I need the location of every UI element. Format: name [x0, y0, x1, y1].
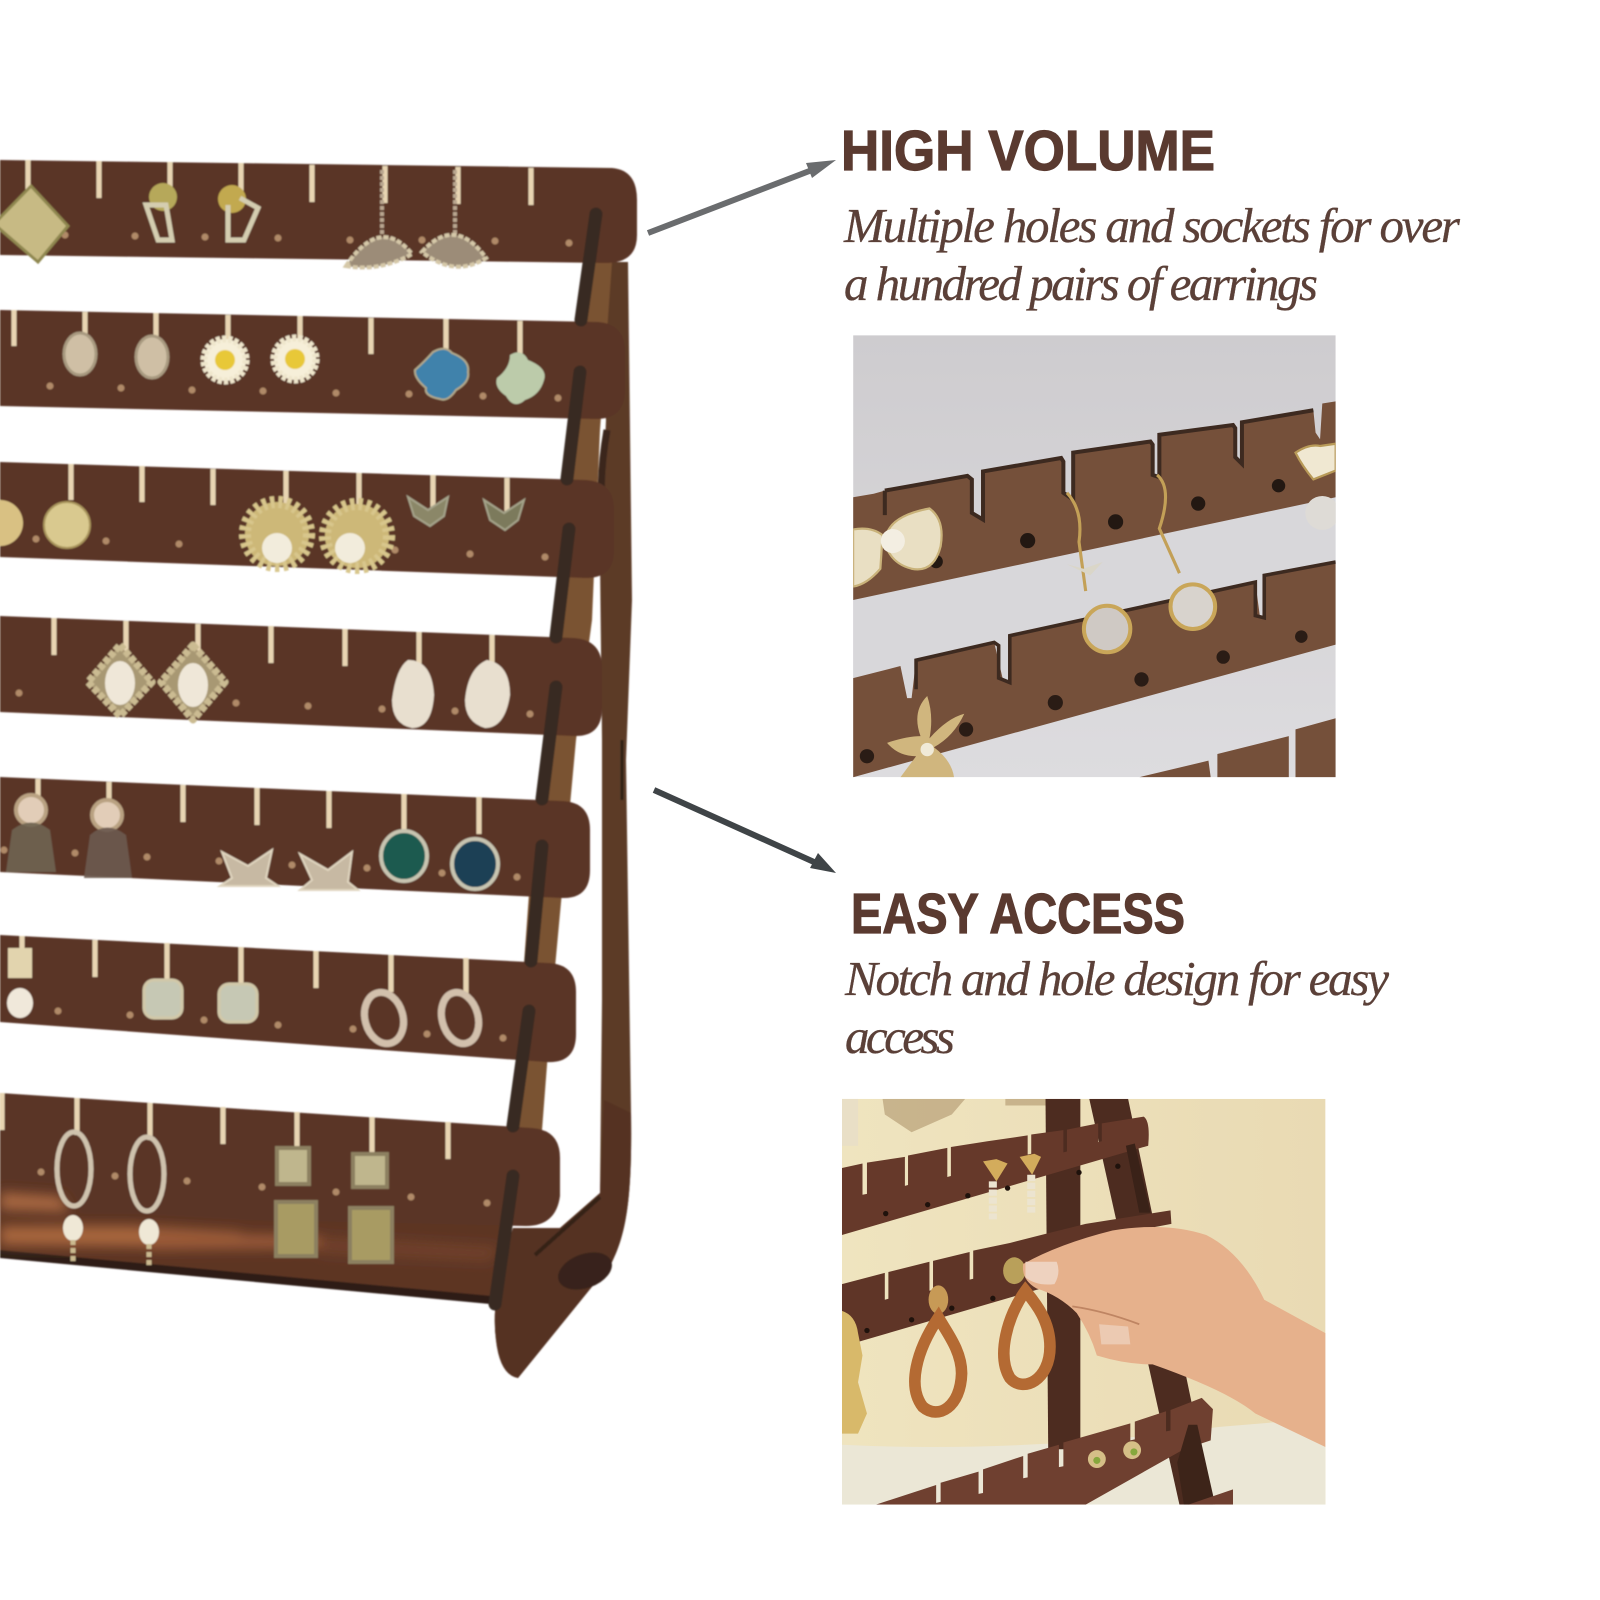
photo: hand taking an earring	[842, 1099, 1325, 1505]
arrow: to Easy Access	[654, 790, 836, 873]
earrings row 2	[64, 333, 545, 404]
description: High Volume	[843, 198, 1461, 311]
description: Easy Access: access	[845, 1009, 955, 1064]
lower back plate	[0, 1190, 513, 1304]
board 4	[0, 616, 602, 736]
arrow: to High Volume	[648, 160, 836, 233]
description: High Volume: Multiple holes and sockets for over	[843, 198, 1461, 253]
earrings row 7	[57, 1132, 392, 1266]
description: Easy Access: Notch and hole design for easy	[844, 951, 1389, 1006]
earrings row 3	[0, 497, 524, 568]
dark leg slots between boards	[495, 214, 596, 1304]
heading: High Volume: HIGH VOLUME	[841, 119, 1215, 183]
description: High Volume: a hundred pairs of earrings	[844, 256, 1318, 311]
photo: close-up of notches and holes	[853, 335, 1339, 777]
description: Easy Access	[844, 951, 1389, 1064]
earrings row 6	[7, 948, 484, 1048]
product photo: earring stand	[0, 160, 637, 1378]
board 7	[0, 1093, 560, 1226]
board 2	[0, 310, 625, 419]
earrings row 1	[0, 170, 486, 268]
stand frame and foot	[495, 262, 632, 1378]
board 1	[0, 160, 637, 263]
board 5	[0, 777, 590, 898]
earrings row 4	[88, 645, 510, 728]
board 6	[0, 935, 576, 1062]
earrings row 5	[6, 795, 498, 890]
board 3	[0, 462, 614, 578]
infographic canvas	[0, 130, 1460, 1505]
heading: Easy Access: EASY ACCESS	[851, 882, 1185, 946]
reflections on lower board	[0, 1192, 500, 1262]
